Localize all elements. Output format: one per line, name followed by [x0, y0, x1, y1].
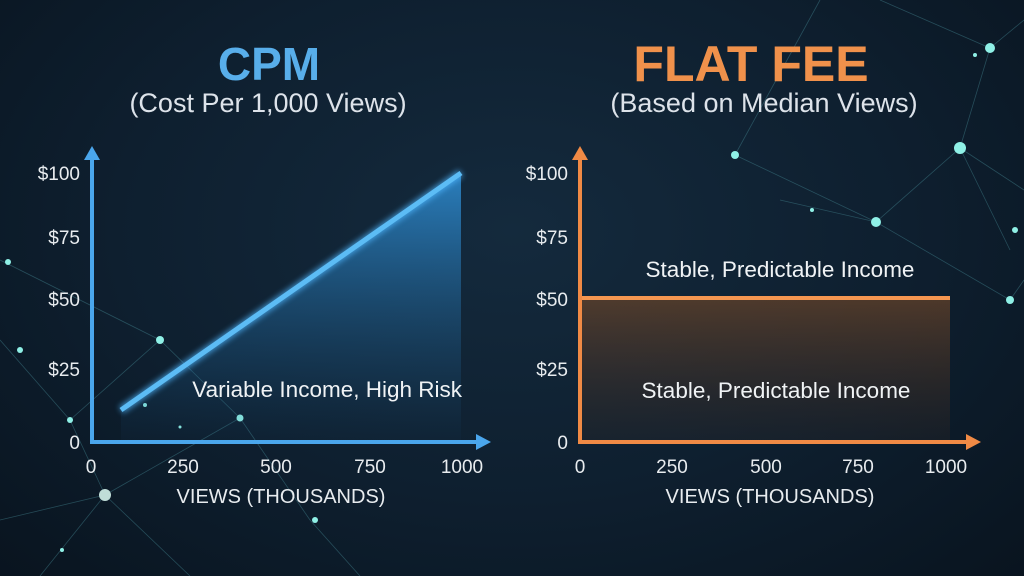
chart: flat fee: 1000 [925, 457, 967, 478]
chart: CPM: $100 [38, 164, 80, 185]
chart: flat fee: VIEWS (THOUSANDS) [666, 486, 874, 508]
title: FLAT FEE: FLAT FEE [633, 36, 869, 92]
chart: CPM: 1000 [441, 457, 483, 478]
title: CPM: CPM [218, 38, 320, 90]
chart: flat fee: Stable, Predictable Income [646, 257, 914, 282]
subtitle: flat fee: (Based on Median Views) [610, 88, 918, 118]
chart: CPM: 0 [69, 433, 80, 454]
chart: flat fee: 500 [750, 457, 782, 478]
chart: flat fee: $25 [536, 360, 568, 381]
chart: flat fee: 250 [656, 457, 688, 478]
subtitle: CPM: (Cost Per 1,000 Views) [129, 88, 407, 118]
chart: flat fee: 0 [557, 433, 568, 454]
chart: CPM: 250 [167, 457, 199, 478]
chart: CPM: $50 [48, 290, 80, 311]
chart: flat fee: 750 [842, 457, 874, 478]
chart: CPM: VIEWS (THOUSANDS) [177, 486, 385, 508]
chart: CPM: 0 [86, 457, 96, 478]
chart: CPM: $75 [48, 228, 80, 249]
chart: CPM: Variable Income, High Risk [192, 377, 463, 402]
chart: flat fee: $100 [526, 164, 568, 185]
chart: CPM: 750 [354, 457, 386, 478]
chart: flat fee: 0 [575, 457, 585, 478]
chart: flat fee: $75 [536, 228, 568, 249]
chart: CPM: 500 [260, 457, 292, 478]
chart: flat fee: $50 [536, 290, 568, 311]
chart: flat fee: Stable, Predictable Income [642, 378, 910, 403]
chart: CPM: $25 [48, 360, 80, 381]
